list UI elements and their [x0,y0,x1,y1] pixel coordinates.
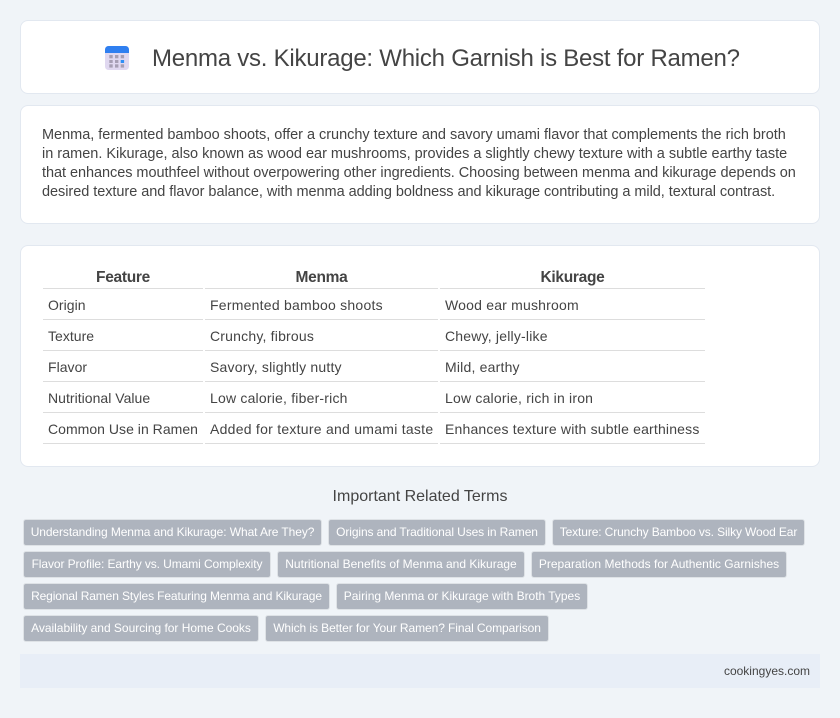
table header: Menma [296,269,347,286]
related term tags: Preparation Methods for Authentic Garnishes [539,557,779,571]
intro text [42,127,796,200]
footer bar [20,654,820,688]
table rows: Texture [48,328,94,344]
related term tags: Availability and Sourcing for Home Cooks [31,621,251,635]
table header [96,269,604,286]
related term tags: Pairing Menma or Kikurage with Broth Types [344,589,580,603]
footer source: cookingyes.com [724,664,810,678]
intro text: that enhances mouthfeel without overpowering other ingredients. Choosing between menma and kikurage depends on [42,165,796,181]
related term tags: Understanding Menma and Kikurage: What Are They? [31,525,314,539]
table rows: Low calorie, fiber-rich [210,390,348,406]
table rows: Wood ear mushroom [445,297,579,313]
table header: Feature [96,269,150,286]
table rows: Flavor [48,359,87,375]
table rows: Low calorie, rich in iron [445,390,593,406]
table rows: Common Use in Ramen [48,421,198,437]
related term tags: Nutritional Benefits of Menma and Kikurage [285,557,517,571]
table rows: Chewy, jelly-like [445,328,548,344]
related term tags: Origins and Traditional Uses in Ramen [336,525,538,539]
table rows: Savory, slightly nutty [210,359,342,375]
table rows: Enhances texture with subtle earthiness [445,421,700,437]
table rows: Added for texture and umami taste [210,421,433,437]
table rows: Crunchy, fibrous [210,328,314,344]
related term tags: Regional Ramen Styles Featuring Menma and Kikurage [31,589,322,603]
related term tags [23,519,805,642]
panel: comparison table [20,245,820,467]
table header: Kikurage [541,269,604,286]
table rows: Mild, earthy [445,359,520,375]
table rows: Origin [48,297,86,313]
related terms heading: Important Related Terms [333,488,507,505]
intro text: Menma, fermented bamboo shoots, offer a crunchy texture and savory umami flavor that complements the rich broth [42,127,786,143]
related term tags: Which is Better for Your Ramen? Final Comparison [273,621,541,635]
panel: introduction [20,105,820,224]
icon: calendar [105,46,129,70]
related term tags: Texture: Crunchy Bamboo vs. Silky Wood Ear [560,525,797,539]
related term tags: Flavor Profile: Earthy vs. Umami Complexity [32,557,262,571]
intro text: desired texture and flavor balance, with menma adding boldness and kikurage contributing a mild, textural contrast. [42,184,775,200]
table rows [43,288,705,444]
intro text: in ramen. Kikurage, also known as wood ear mushrooms, provides a slightly chewy texture with a subtle earthy taste [42,146,787,162]
table rows: Nutritional Value [48,390,150,406]
title: Menma vs. Kikurage: Which Garnish is Best for Ramen? [152,45,740,72]
table rows: Fermented bamboo shoots [210,297,383,313]
header panel [20,20,820,94]
